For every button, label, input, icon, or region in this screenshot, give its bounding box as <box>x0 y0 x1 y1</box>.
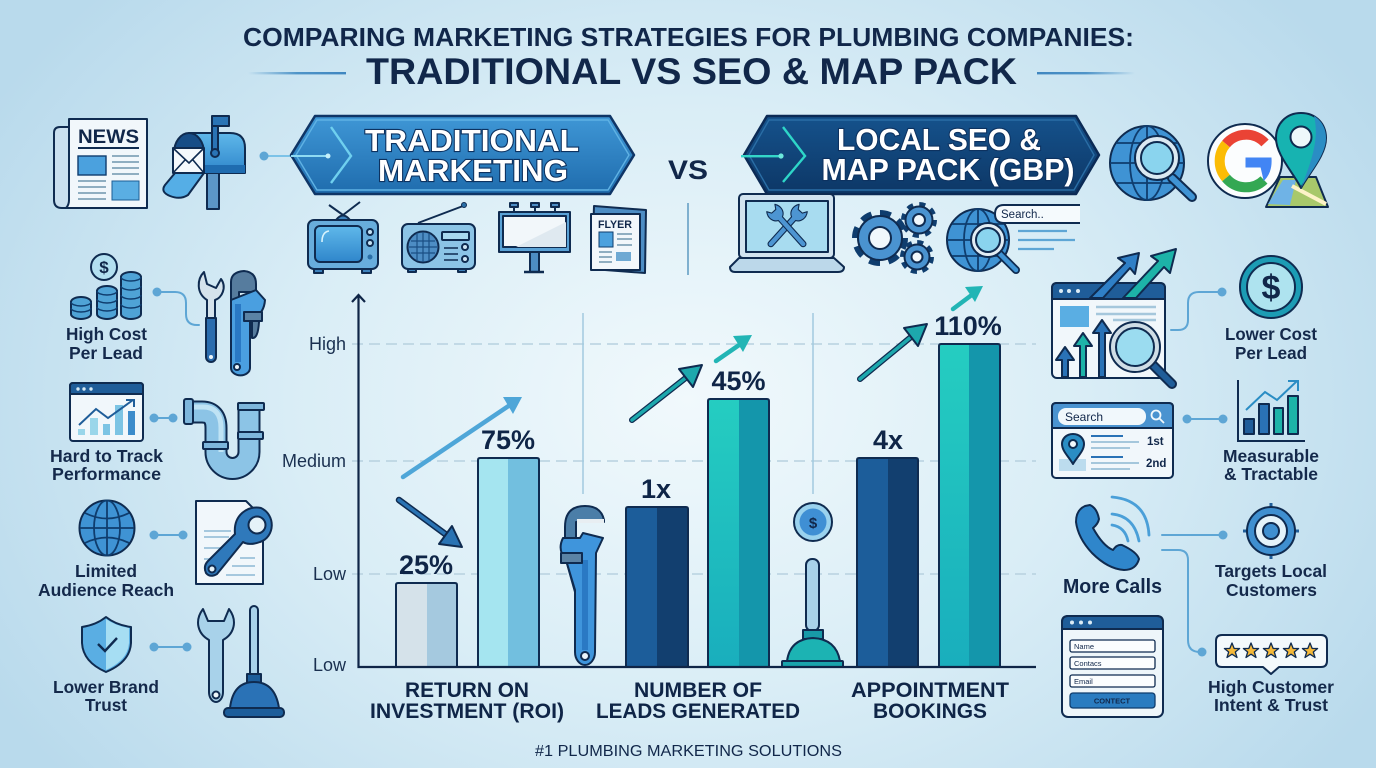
item: high cost per lead <box>66 254 147 363</box>
item: targets local customers: Targets Local <box>1215 561 1327 581</box>
panel: traditional marketing banner <box>291 116 634 194</box>
bar: roi traditional 25%: 25% <box>399 550 453 580</box>
item: lower brand trust: Trust <box>85 695 127 715</box>
connector: mailbox to traditional <box>260 152 330 160</box>
item: lower brand trust <box>53 617 159 715</box>
icon: pipe wrench in chart <box>561 506 604 665</box>
icon: contact form <box>1062 616 1163 717</box>
icon: search results panel: 1st <box>1147 436 1164 448</box>
icon: contact form: CONTECT <box>1094 696 1131 706</box>
item: measurable and tractable <box>1223 380 1319 484</box>
category label: bookings: APPOINTMENT <box>851 679 1009 702</box>
icon: u-bend pipe <box>184 399 264 468</box>
item: hard to track performance: Performance <box>52 464 161 484</box>
vs label: VS <box>668 155 708 185</box>
y-axis labels: Medium <box>282 451 346 471</box>
panel: local seo banner <box>741 116 1099 194</box>
panel: traditional marketing banner: MARKETING <box>378 153 568 188</box>
y-axis labels: Low <box>313 564 347 584</box>
title: TRADITIONAL VS SEO & MAP PACK <box>366 51 1017 92</box>
icon: newspaper: NEWS <box>78 127 139 148</box>
connector: reach to document <box>150 530 188 540</box>
item: hard to track performance: Hard to Track <box>50 446 163 466</box>
bar: bookings traditional 4x <box>857 425 918 667</box>
icon: coin <box>794 503 832 541</box>
panel: local seo banner: LOCAL SEO & <box>837 122 1041 157</box>
arrow: roi down <box>399 500 462 547</box>
connector: browser to lower cost <box>1171 288 1226 330</box>
connector: search to measurable <box>1182 414 1228 424</box>
y-axis labels <box>282 334 347 675</box>
icon: wrenches <box>199 271 265 375</box>
bar: bookings traditional 4x: 4x <box>873 425 903 455</box>
category label: roi: INVESTMENT (ROI) <box>370 700 564 723</box>
icon: billboard <box>499 203 570 272</box>
connector: tracking to pipe <box>150 414 178 422</box>
connector: cost to wrenches <box>152 288 199 325</box>
title: COMPARING MARKETING STRATEGIES FOR PLUMBING COMPANIES: <box>243 22 1134 52</box>
category label: bookings <box>851 679 1009 723</box>
bar: roi seo 75% <box>478 425 539 667</box>
icon: newspaper <box>54 119 147 208</box>
category label: roi: RETURN ON <box>405 679 529 702</box>
item: limited audience reach: Limited <box>75 561 137 581</box>
icon: map pin <box>1266 113 1328 207</box>
bar: leads traditional 1x <box>626 474 688 667</box>
item: high customer intent and trust: High Customer <box>1208 677 1334 697</box>
item: lower cost per lead: Lower Cost <box>1225 324 1317 344</box>
icon: contact form: Name <box>1074 642 1094 651</box>
chart: marketing comparison <box>282 286 1036 723</box>
icon: globe with search bar <box>947 205 1080 271</box>
item: high customer intent and trust <box>1208 635 1334 715</box>
item: measurable and tractable: & Tractable <box>1224 464 1318 484</box>
icon: plunger in chart <box>782 559 843 667</box>
bar: bookings seo 110% <box>934 311 1002 667</box>
item: high cost per lead: Per Lead <box>69 343 143 363</box>
footer text: #1 PLUMBING MARKETING SOLUTIONS <box>535 743 842 760</box>
bar: leads seo 45%: 45% <box>711 366 766 396</box>
icon: google logo <box>1208 124 1282 198</box>
bar: leads seo 45% <box>708 366 769 667</box>
item: lower cost per lead: Per Lead <box>1235 343 1307 363</box>
divider: vs <box>687 203 689 275</box>
item: more calls: More Calls <box>1063 576 1162 598</box>
icon: coin: $ <box>809 515 818 532</box>
y-axis labels: Low <box>313 655 347 675</box>
y-axis labels: High <box>309 334 346 354</box>
item: high cost per lead: $ <box>99 258 109 277</box>
item: lower brand trust: Lower Brand <box>53 677 159 697</box>
arrow: bookings up <box>860 324 927 379</box>
icon: globe with search bar: Search.. <box>1001 209 1044 221</box>
category label: roi <box>370 679 564 723</box>
item: hard to track performance <box>50 383 163 484</box>
panel: local seo banner: MAP PACK (GBP) <box>822 152 1074 187</box>
item: high customer intent and trust: Intent & Trust <box>1214 695 1328 715</box>
icon: search results panel: 2nd <box>1146 458 1166 470</box>
arrow: leads up <box>632 365 702 420</box>
icon: gears <box>855 204 934 272</box>
chart axes <box>352 295 1036 667</box>
icon: search results panel: Search <box>1065 410 1103 424</box>
item: targets local customers: Customers <box>1226 580 1317 600</box>
category label: leads <box>596 679 800 723</box>
item: lower cost per lead: $ <box>1262 269 1281 307</box>
item: limited audience reach: Audience Reach <box>38 580 174 600</box>
chart group dividers <box>583 313 813 494</box>
icon: radio <box>402 202 475 272</box>
icon: wrench and plunger <box>198 606 284 717</box>
icon: television <box>308 202 378 273</box>
item: targets local customers <box>1215 503 1327 600</box>
panel: right seo benefits <box>1052 249 1334 717</box>
item: more calls <box>1063 497 1162 598</box>
item: lower cost per lead <box>1225 256 1317 363</box>
title <box>243 22 1135 92</box>
icon: contact form: Contacs <box>1074 659 1102 668</box>
chart grid lines <box>352 344 1036 574</box>
icon: globe search <box>1110 126 1192 200</box>
icon: flyer <box>591 206 646 273</box>
category label: leads: LEADS GENERATED <box>596 700 800 723</box>
bar: roi seo 75%: 75% <box>481 425 535 455</box>
arrow: roi up <box>403 397 522 477</box>
bar: roi traditional 25% <box>396 550 457 667</box>
icon: mailbox <box>163 116 245 209</box>
panel: left traditional drawbacks <box>38 254 284 717</box>
connectors: calls to targets and trust <box>1162 530 1228 656</box>
item: limited audience reach <box>38 500 174 600</box>
arrow: bookings small up <box>953 286 983 309</box>
item: high cost per lead: High Cost <box>66 324 147 344</box>
icon: laptop with wrenches <box>730 194 844 272</box>
category label: bookings: BOOKINGS <box>873 700 987 723</box>
connector: trust to tools <box>150 642 192 652</box>
icon: flyer: FLYER <box>598 219 632 231</box>
bar: leads traditional 1x: 1x <box>641 474 671 504</box>
panel: traditional marketing banner: TRADITIONAL <box>365 123 579 158</box>
bar: bookings seo 110%: 110% <box>934 311 1002 341</box>
icon: search results panel <box>1052 403 1173 478</box>
icon: contact form: Email <box>1074 677 1093 686</box>
category label: leads: NUMBER OF <box>634 679 762 702</box>
arrow: leads small up <box>716 335 752 361</box>
icon: document with wrench <box>196 501 272 584</box>
item: measurable and tractable: Measurable <box>1223 446 1319 466</box>
icon: browser growth with magnifier <box>1052 249 1176 384</box>
